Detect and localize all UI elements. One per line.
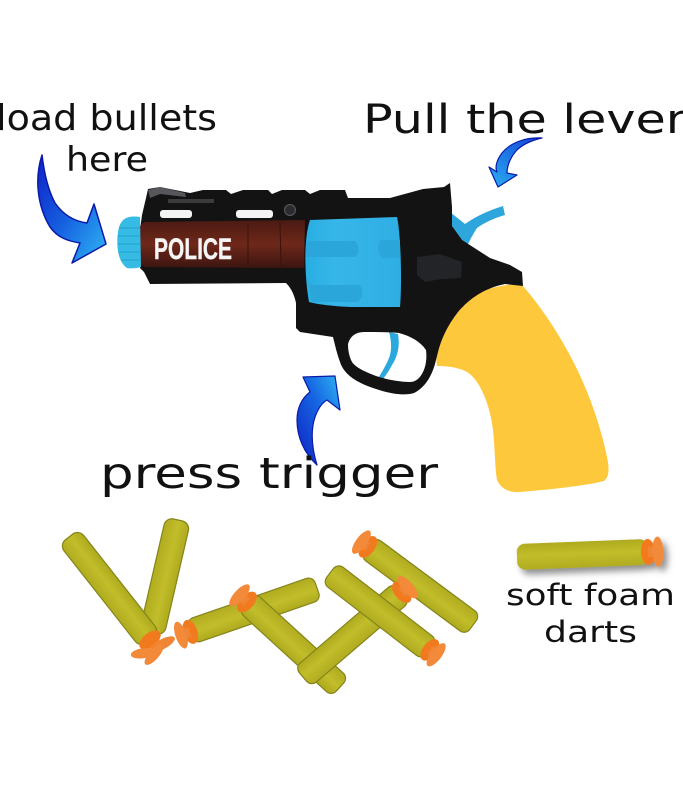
dart: [171, 575, 322, 650]
barrel vent 2: [236, 210, 273, 218]
label: pull the lever: Pull the lever: [363, 97, 683, 143]
POLICE lettering: POLICE: [154, 233, 232, 266]
frame: [140, 183, 523, 394]
dart: [140, 517, 190, 636]
single foam dart: [516, 536, 664, 572]
arrow: to trigger: [297, 376, 340, 465]
muzzle cap: [117, 216, 141, 268]
label: load bullets here: [0, 98, 217, 180]
label: soft foam darts: soft foam: [506, 578, 675, 612]
label: press trigger: press trigger: [100, 449, 438, 499]
arrow: to lever: [489, 138, 542, 187]
grip: [436, 284, 609, 492]
toy revolver: [117, 183, 609, 492]
sight line: [168, 199, 214, 203]
dart: [294, 573, 421, 688]
arrow: to muzzle: [38, 155, 106, 263]
foam darts pile: [48, 517, 481, 697]
barrel vent 1: [160, 210, 192, 218]
label: load bullets here: here: [66, 140, 148, 180]
hammer lever: [450, 206, 505, 246]
label: soft foam darts: darts: [544, 615, 637, 649]
dart: [349, 528, 481, 636]
dart with suction cup: [48, 524, 180, 673]
barrel seams: [248, 222, 281, 266]
screw: [284, 204, 296, 216]
label: load bullets here: load bullets: [0, 98, 217, 139]
dart: [226, 581, 349, 697]
dart: [321, 562, 449, 669]
red barrel: [138, 220, 305, 268]
knurled panel: [417, 254, 462, 282]
cylinder: [305, 217, 401, 307]
label: soft foam darts: [506, 578, 675, 649]
rail highlight: [148, 187, 186, 198]
cylinder flutes: [306, 240, 400, 302]
trigger: [379, 332, 399, 379]
